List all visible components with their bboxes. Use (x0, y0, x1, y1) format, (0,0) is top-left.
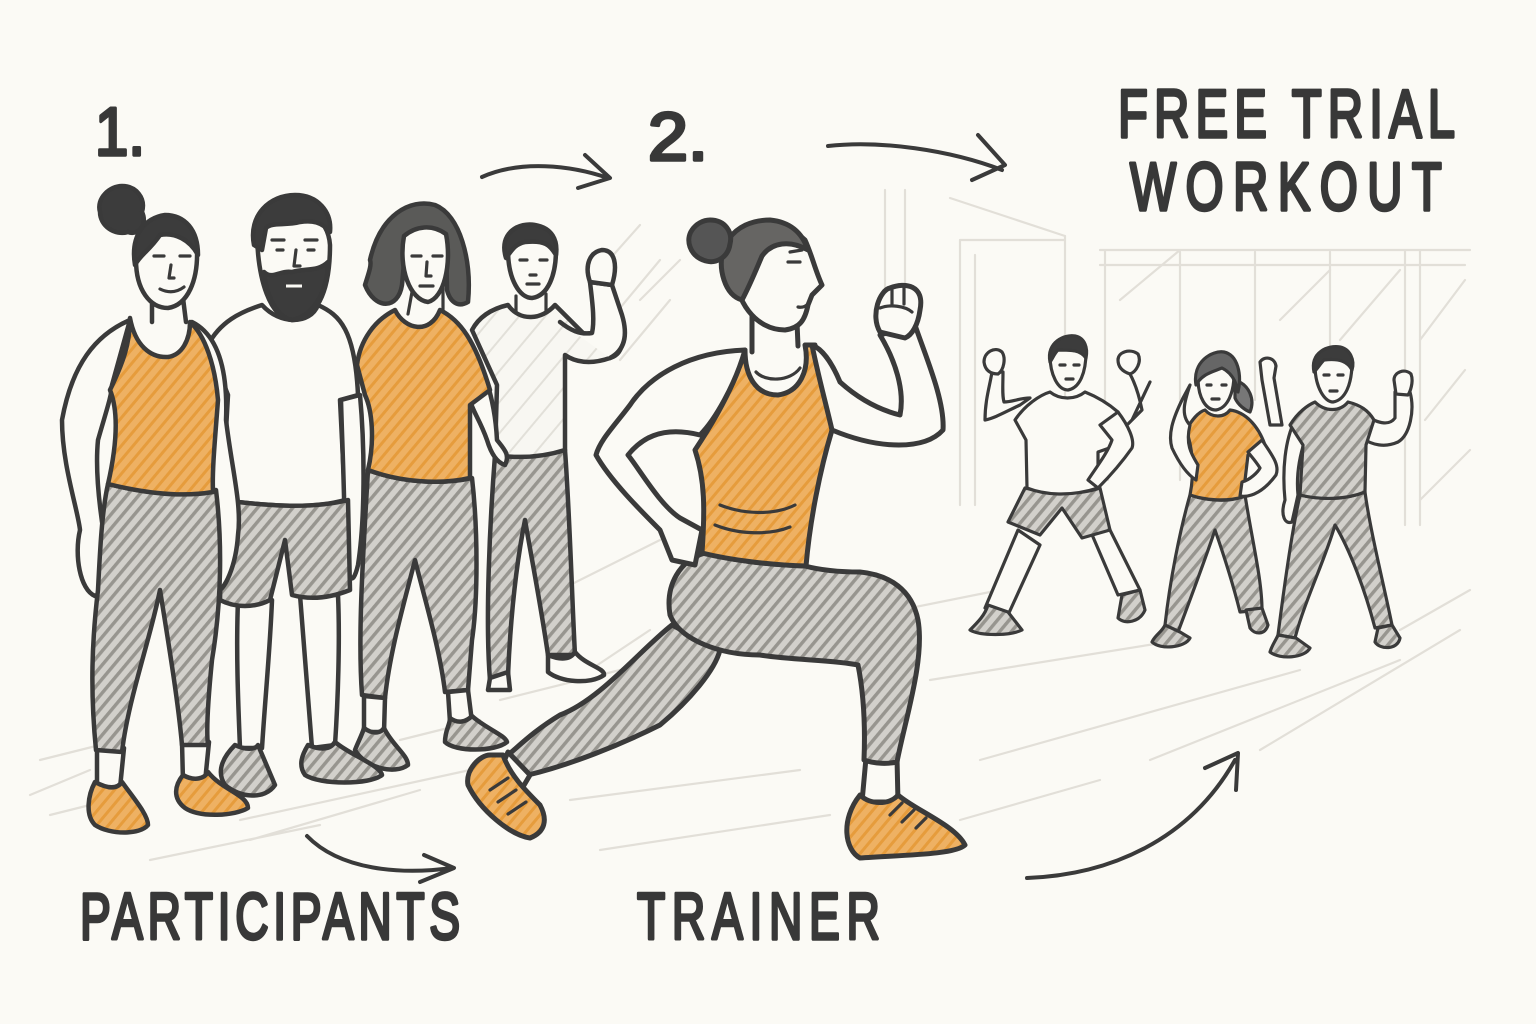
right lower leg (300, 595, 339, 748)
face (1207, 385, 1226, 399)
raised arm (560, 282, 625, 358)
arrow: step 2 to free trial workout (828, 135, 1005, 180)
lower legs (97, 742, 209, 788)
head (1198, 365, 1234, 410)
face (788, 250, 808, 307)
right arm raised (1362, 392, 1412, 445)
tank top (695, 345, 832, 566)
neck (152, 298, 186, 322)
left shoe (1152, 625, 1190, 647)
face (154, 256, 190, 292)
head (257, 207, 330, 320)
right shoe (1375, 625, 1400, 648)
participant 3: woman in orange tee (355, 203, 507, 770)
left arm (1283, 420, 1305, 523)
shoes (221, 745, 275, 796)
leggings (92, 484, 220, 752)
right arm hand on hip (1088, 412, 1133, 488)
face (1324, 375, 1343, 391)
face (1060, 365, 1079, 379)
head (1315, 355, 1352, 402)
right arm flexed (812, 325, 943, 445)
shirt (472, 305, 622, 457)
left shoe (89, 782, 148, 832)
step number 2: 2. (648, 99, 708, 175)
gym background sketch (30, 190, 1470, 860)
heading: free trial workout (1118, 75, 1455, 225)
tee (1290, 402, 1374, 498)
fist fingers (880, 287, 912, 312)
left arm on hip (596, 350, 745, 565)
facial features (272, 240, 317, 266)
label: participants: PARTICIPANTS (80, 880, 460, 954)
heading line 1: FREE TRIAL (1118, 75, 1455, 152)
arm (341, 395, 364, 578)
participant 1: woman with hair bun in orange tank (62, 186, 248, 832)
arrow: participants to trainer (307, 836, 454, 882)
ponytail (1235, 380, 1252, 412)
right arm (192, 322, 239, 592)
leggings (1165, 495, 1262, 632)
right shoe (301, 742, 382, 782)
mouth (286, 284, 302, 288)
fist (1394, 371, 1412, 395)
fists and raised arm of neighbour (984, 350, 1139, 374)
trainer: large lunging woman (468, 220, 965, 858)
trousers (1278, 492, 1392, 638)
ankle (364, 690, 472, 732)
tank top (108, 318, 218, 494)
far arm strokes (1128, 374, 1150, 424)
hair (721, 220, 808, 300)
legs (985, 520, 1140, 615)
neck (752, 312, 798, 352)
left shoe (1270, 635, 1310, 657)
hair (365, 203, 469, 304)
hair bun (99, 186, 144, 233)
trousers (488, 450, 575, 680)
tee (1186, 410, 1265, 500)
hair (134, 215, 198, 265)
head (508, 236, 556, 298)
left shoe (970, 605, 1022, 634)
head (1050, 347, 1086, 390)
back ankle (498, 752, 530, 792)
right shoe (445, 716, 507, 750)
hair (253, 195, 330, 250)
shoes (548, 652, 604, 681)
arrow: trainer to workout (1027, 753, 1238, 878)
hair (1049, 336, 1087, 362)
shirt (1015, 392, 1132, 494)
head (735, 231, 822, 330)
hair (1195, 352, 1239, 392)
left arm (62, 320, 130, 596)
face (516, 260, 547, 312)
background figure: man in white tee (970, 336, 1150, 634)
beard (264, 262, 328, 320)
fist (876, 285, 921, 338)
hair bun (689, 220, 731, 262)
shorts (1008, 488, 1110, 538)
right shoe (176, 772, 248, 815)
right shoe (1118, 590, 1145, 622)
arm (470, 345, 507, 465)
face (402, 227, 448, 302)
head (136, 222, 197, 308)
torso fold marks (715, 505, 795, 533)
left shoe (355, 728, 408, 770)
back leg (508, 625, 720, 775)
front shoe (847, 795, 965, 858)
right arm (1240, 440, 1277, 496)
tee (357, 310, 490, 482)
shorts (220, 500, 350, 606)
back shoe (468, 755, 544, 838)
label: trainer: TRAINER (637, 880, 880, 954)
left arm (985, 372, 1030, 420)
background figure: man in grey tee (1270, 347, 1412, 657)
right shoe (1246, 608, 1268, 633)
step number 1: 1. (95, 94, 145, 170)
features (408, 256, 443, 314)
hair (504, 224, 556, 258)
arms (1170, 385, 1198, 480)
leggings (360, 470, 476, 698)
background figure: woman in orange tee (1152, 352, 1282, 647)
neckline (756, 368, 800, 379)
fist (588, 250, 615, 285)
front leg and hip (669, 553, 919, 763)
raised arm behind (1260, 358, 1282, 425)
front ankle (862, 758, 898, 802)
participant 2: bearded man (208, 195, 382, 796)
arrow: step 1 to step 2 (482, 155, 610, 188)
shirt (208, 305, 358, 506)
heading line 2: WORKOUT (1130, 148, 1442, 225)
lower legs (237, 600, 272, 748)
left shoe (488, 672, 510, 690)
hair (1313, 347, 1353, 372)
shoe laces (490, 778, 926, 828)
participant 4: man flexing in back (472, 224, 625, 690)
